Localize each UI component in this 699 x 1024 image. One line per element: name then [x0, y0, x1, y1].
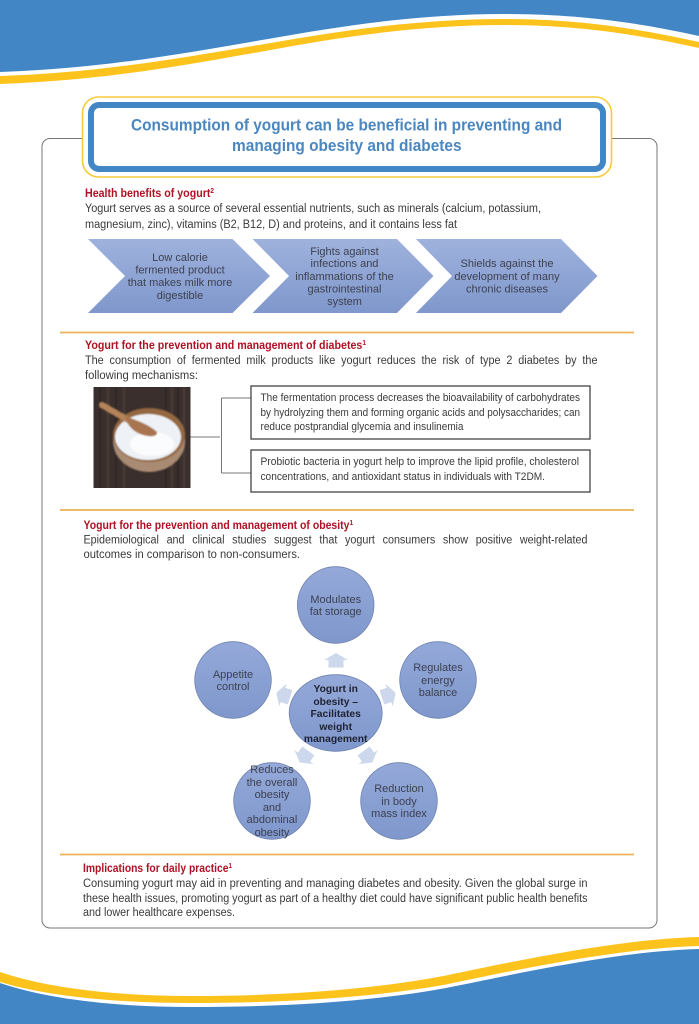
mechanism box: fermentation: The fermentation process decreases the bioavailability of carbohydrates — [260, 392, 581, 404]
node: reduces overall and abdominal obesity: obesity — [255, 789, 290, 801]
center node: yogurt in obesity: weight — [318, 722, 353, 733]
node: modulates fat storage: Modulates — [310, 594, 362, 606]
node: reduction in body mass index: in body — [381, 796, 417, 808]
section: implications — [83, 863, 588, 919]
body text: implications: these health issues, promoting yogurt as part of a healthy diet could have significant public health benefits — [83, 893, 588, 905]
node: regulates energy balance: Regulates — [413, 662, 463, 674]
body text: diabetes — [85, 355, 598, 382]
node: modulates fat storage: fat storage — [310, 606, 362, 618]
arrow: to appetite control — [273, 681, 294, 709]
connector bracket — [190, 398, 251, 473]
heading: obesity: Yogurt for the prevention and management of obesity — [84, 520, 376, 532]
center node: yogurt in obesity: Yogurt in — [313, 684, 358, 695]
section: health benefits — [85, 188, 598, 313]
body text: implications: and lower healthcare expenses. — [83, 907, 235, 919]
title text: Consumption of yogurt can be beneficial in preventing and — [131, 116, 562, 134]
chevron: fights infections — [252, 239, 434, 313]
node: reduction in body mass index: Reduction — [374, 783, 424, 795]
heading: diabetes: 1 — [362, 340, 366, 347]
node: reduction in body mass index — [361, 763, 437, 839]
center node: yogurt in obesity: management — [304, 734, 368, 745]
node: appetite control: Appetite — [213, 669, 253, 681]
body text: diabetes: following mechanisms: — [85, 370, 198, 382]
body text: implications: Consuming yogurt may aid in preventing and managing diabetes and obesity. Given the global surge in — [83, 878, 588, 890]
photo: bowl of yogurt with wooden spoon — [94, 387, 190, 488]
chevron: fights infections: Fights against — [310, 246, 379, 258]
node: reduces overall and abdominal obesity — [234, 763, 310, 839]
chevron: low calorie — [88, 239, 270, 313]
body text: implications — [83, 878, 588, 919]
chevron: shields against: Shields against the — [461, 258, 553, 270]
center node: yogurt in obesity: Facilitates — [311, 709, 361, 720]
heading: implications: 1 — [228, 863, 232, 870]
chevron: low calorie: Low calorie — [152, 252, 208, 264]
mechanism box: fermentation: by hydrolyzing them and forming organic acids and polysaccharides; can — [260, 407, 580, 419]
heading: implications: Implications for daily practice — [83, 863, 245, 875]
chevron: fights infections: system — [327, 296, 362, 308]
chevron: shields against: chronic diseases — [466, 284, 548, 296]
mechanism box: probiotic bacteria: Probiotic bacteria in yogurt help to improve the lipid profile, cholesterol — [260, 456, 579, 468]
node: reduces overall and abdominal obesity: abdominal — [247, 814, 297, 826]
chevron: shields against — [416, 239, 598, 313]
node: regulates energy balance: energy — [421, 675, 455, 687]
node: reduces overall and abdominal obesity: Reduces — [250, 764, 294, 776]
body text: health benefits: magnesium, zinc), vitamins (B2, B12, D) and proteins, and it contains less fat — [85, 219, 458, 231]
heading: health benefits: 2 — [210, 188, 214, 195]
chevron: low calorie: fermented product — [135, 264, 225, 276]
chevron: fights infections: inflammations of the — [295, 271, 394, 283]
body text: health benefits: Yogurt serves as a source of several essential nutrients, such as minerals (calcium, potassium, — [85, 203, 541, 215]
body text: diabetes: The consumption of fermented milk products like yogurt reduces the risk of type 2 diabetes by the — [85, 355, 598, 367]
body text: obesity: outcomes in comparison to non-consumers. — [84, 549, 300, 561]
body text: obesity — [84, 534, 588, 561]
node: reduces overall and abdominal obesity: and — [263, 802, 281, 814]
chevron: low calorie: digestible — [157, 290, 203, 302]
section: diabetes — [85, 340, 598, 492]
bottom wave banner — [0, 937, 699, 1024]
chevron: fights infections: infections and — [311, 258, 378, 270]
mechanism box: probiotic bacteria: concentrations, and antioxidant status in individuals with T2DM. — [260, 471, 545, 483]
chevron: fights infections: gastrointestinal — [308, 284, 382, 296]
heading: health benefits: Health benefits of yogurt — [85, 188, 220, 200]
arrow: to modulates fat storage — [324, 653, 348, 668]
node: modulates fat storage — [297, 567, 374, 643]
center node: yogurt in obesity — [289, 675, 382, 751]
arrow: to reduction in BMI — [354, 744, 382, 770]
heading: obesity: 1 — [349, 520, 353, 527]
main content panel outline — [42, 138, 657, 928]
mechanism box: fermentation: reduce postprandial glycemia and insulinemia — [260, 421, 464, 433]
node: reduces overall and abdominal obesity: the overall — [247, 777, 297, 789]
section: obesity — [84, 520, 588, 839]
mechanism box: probiotic bacteria — [251, 450, 590, 492]
radial diagram — [195, 567, 476, 839]
arrow: to reduces obesity — [290, 744, 318, 770]
node: regulates energy balance: balance — [419, 687, 457, 699]
body text: obesity: Epidemiological and clinical studies suggest that yogurt consumers show positive weight-related — [84, 534, 588, 546]
node: regulates energy balance — [400, 642, 476, 718]
node: appetite control: control — [216, 681, 250, 693]
title text: managing obesity and diabetes — [232, 137, 462, 155]
mechanism box: fermentation — [251, 386, 590, 439]
center node: yogurt in obesity: obesity – — [313, 697, 358, 708]
chevron: shields against: development of many — [454, 271, 560, 283]
node: reduction in body mass index: mass index — [371, 808, 427, 820]
chevron: low calorie: that makes milk more — [128, 277, 232, 289]
top wave banner — [0, 0, 699, 84]
body text: health benefits — [85, 203, 541, 231]
heading: diabetes: Yogurt for the prevention and management of diabetes — [85, 340, 384, 352]
arrow: to regulates energy balance — [378, 681, 399, 709]
node: reduces overall and abdominal obesity: obesity — [255, 827, 290, 839]
title box — [82, 97, 612, 177]
node: appetite control — [195, 642, 271, 718]
